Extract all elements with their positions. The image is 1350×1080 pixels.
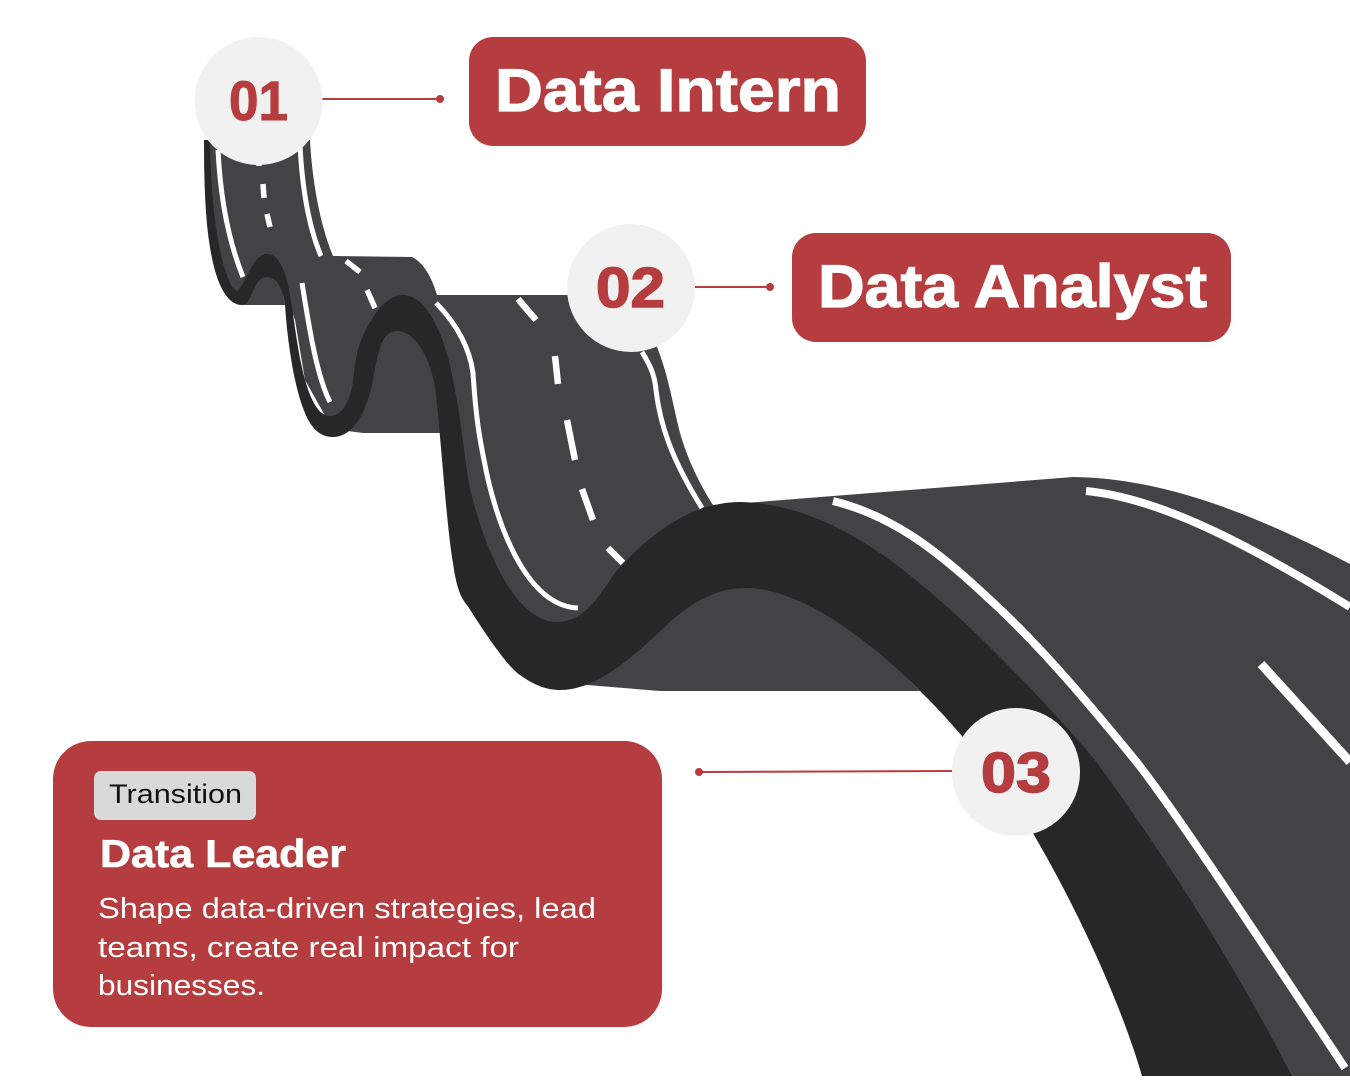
step badge 02	[567, 224, 695, 352]
winding road illustration	[204, 140, 1350, 1076]
tag: Transition	[94, 771, 256, 820]
panel description	[98, 893, 596, 1002]
label: Data Intern	[469, 37, 866, 146]
road surface	[204, 140, 1350, 1076]
step badge 01: 01	[229, 69, 288, 132]
white road lines	[218, 145, 1350, 1068]
panel heading: Data Leader	[100, 833, 346, 876]
connector 02	[693, 283, 774, 291]
connector 03	[695, 768, 955, 776]
step badge 01	[194, 37, 322, 165]
label: Data Intern: Data Intern	[495, 57, 841, 124]
tag: Transition: Transition	[109, 779, 242, 809]
label: Data Analyst	[792, 233, 1231, 342]
label: Data Analyst: Data Analyst	[818, 253, 1207, 320]
step badge 02: 02	[596, 256, 665, 320]
panel description: Shape data-driven strategies, lead	[98, 893, 596, 925]
panel description: businesses.	[98, 970, 265, 1002]
connector 01	[320, 95, 444, 103]
step badge 03	[952, 708, 1080, 836]
road undersides	[242, 266, 920, 691]
panel: Data Leader	[53, 741, 662, 1027]
panel description: teams, create real impact for	[98, 932, 519, 964]
step badge 03: 03	[981, 741, 1051, 805]
road dark edge band	[204, 140, 1292, 1076]
